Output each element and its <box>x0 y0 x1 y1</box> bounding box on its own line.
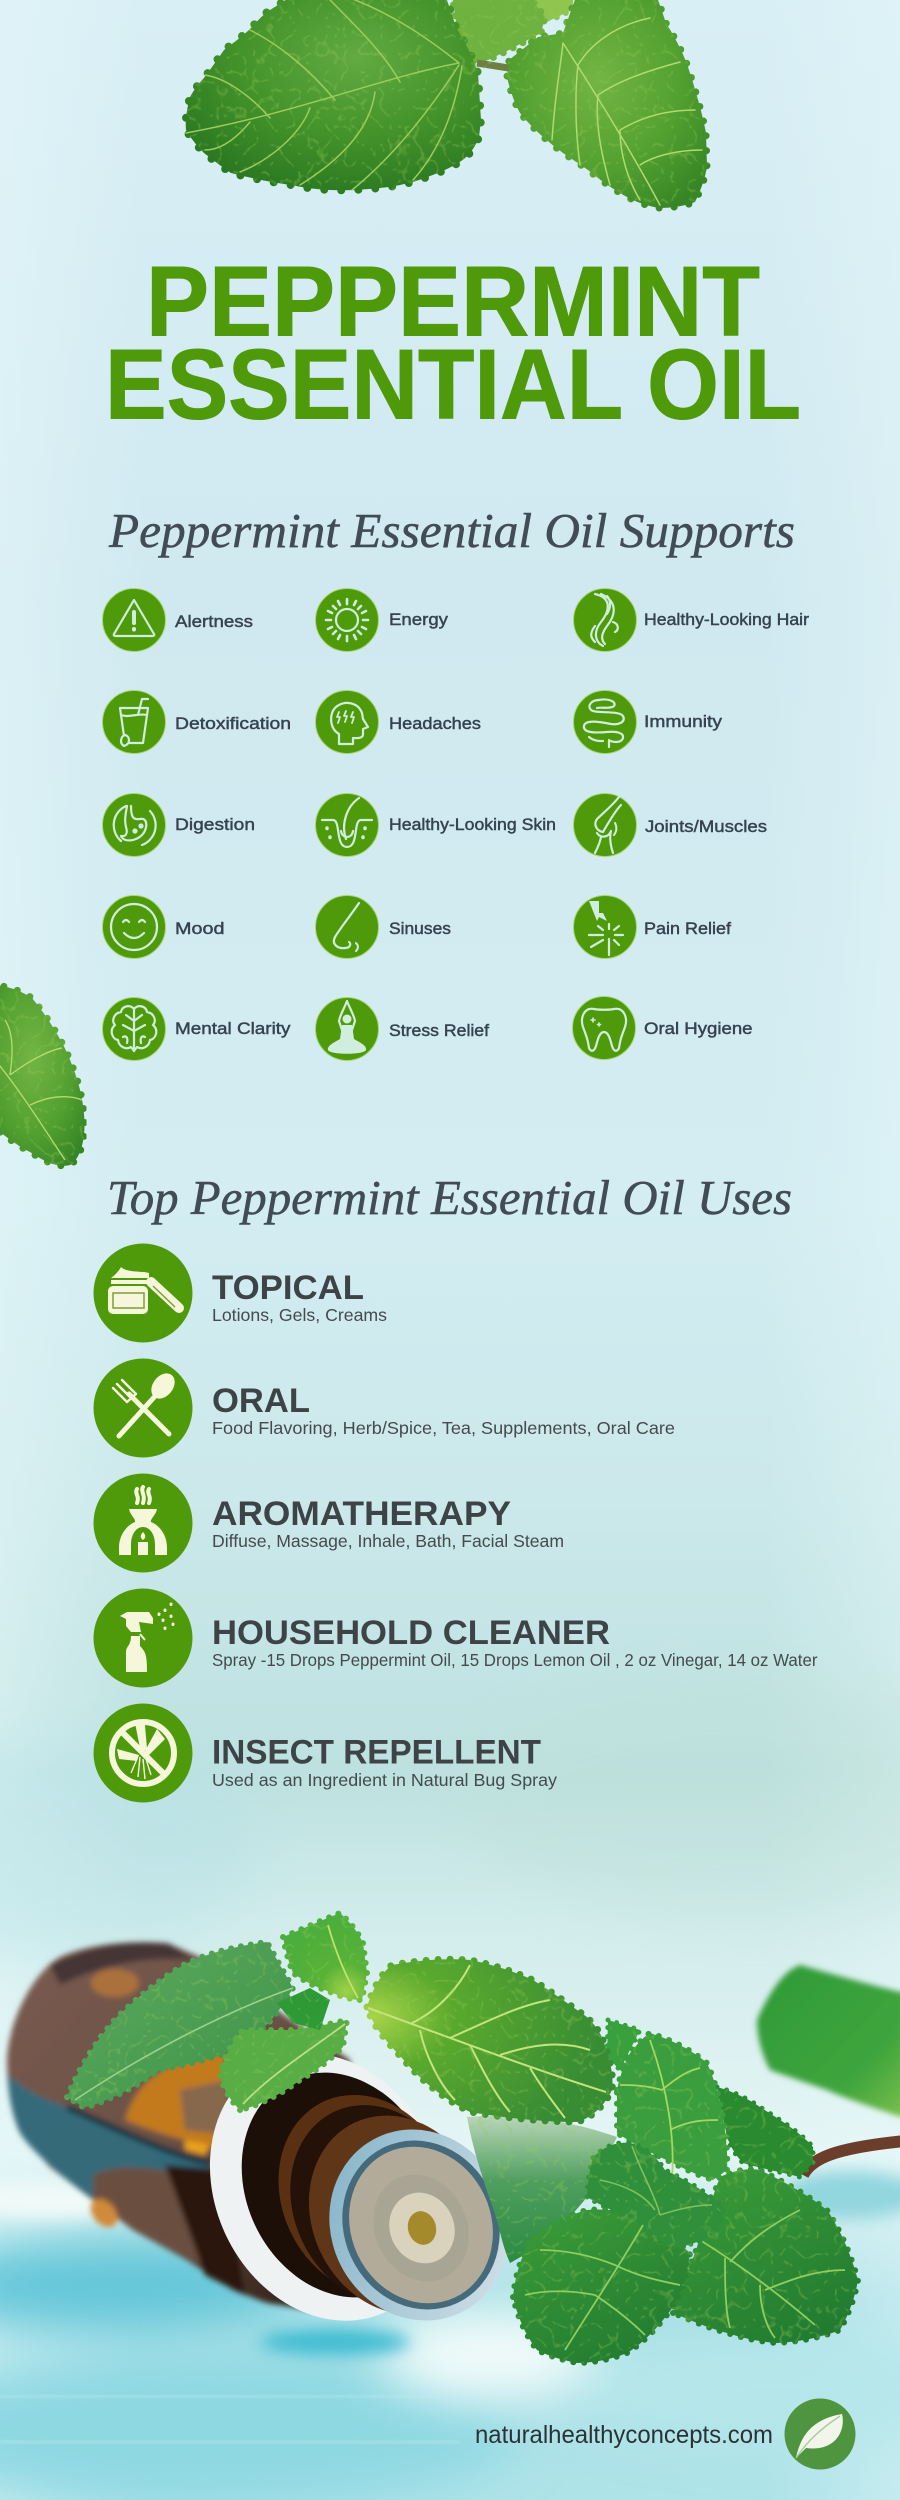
blurred right leaf <box>757 1965 900 2118</box>
use: Aromatherapy <box>94 1474 564 1572</box>
top mint leaves <box>186 0 707 208</box>
item: Mental Clarity <box>102 998 291 1060</box>
leaf: big center <box>367 1959 613 2122</box>
leaf: top middle <box>452 0 545 63</box>
fresh mint sprig <box>67 1913 858 2363</box>
stem <box>803 2141 900 2175</box>
leaf: middle cluster <box>587 2143 723 2248</box>
item: Immunity: Immunity <box>644 712 723 731</box>
item: Digestion: Digestion <box>175 815 255 834</box>
use: Topical: TOPICAL <box>212 1269 364 1307</box>
item: Energy: Energy <box>389 610 449 629</box>
leaf: top small <box>283 1913 367 2000</box>
item: Detoxification <box>102 690 291 754</box>
use: Insect Repellent: Used as an Ingredient in Natural Bug Spray <box>212 1770 557 1790</box>
item: Joints/Muscles <box>574 794 767 856</box>
side mint leaf <box>0 985 84 1166</box>
use: Household Cleaner: HOUSEHOLD CLEANER <box>212 1614 610 1652</box>
item: Mood <box>102 896 224 958</box>
leaf: small left front <box>220 2020 347 2110</box>
use: Household Cleaner: Spray -15 Drops Peppermint Oil, 15 Drops Lemon Oil , 2 oz Vinegar, 14 oz Water <box>212 1650 818 1670</box>
item: Pain Relief: Pain Relief <box>644 919 731 938</box>
use: Household Cleaner <box>94 1588 818 1688</box>
item: Healthy-Looking Hair <box>574 588 809 652</box>
use: Oral <box>94 1358 675 1458</box>
leaf: top bright sprig <box>527 0 574 20</box>
use: Insect Repellent <box>94 1704 557 1802</box>
item: Headaches: Headaches <box>389 714 481 733</box>
uses list <box>94 1244 818 1802</box>
use: Oral: ORAL <box>212 1382 310 1420</box>
item: Energy <box>316 588 449 652</box>
use: Oral: Food Flavoring, Herb/Spice, Tea, Supplements, Oral Care <box>212 1418 675 1438</box>
use: Aromatherapy: AROMATHERAPY <box>212 1495 511 1533</box>
leaf behind right <box>717 2087 813 2177</box>
heading: supports: Peppermint Essential Oil Supports <box>108 503 795 558</box>
use: Insect Repellent: INSECT REPELLENT <box>212 1734 541 1772</box>
item: Detoxification: Detoxification <box>175 714 291 733</box>
leaf small behind <box>607 2020 640 2070</box>
leaf: bottom right <box>673 2169 858 2343</box>
item: Joints/Muscles: Joints/Muscles <box>645 817 767 836</box>
item: Healthy-Looking Skin <box>316 794 556 856</box>
footer website: naturalhealthyconcepts.com <box>475 2421 773 2449</box>
use: Aromatherapy: Diffuse, Massage, Inhale, Bath, Facial Steam <box>212 1531 564 1551</box>
item: Mood: Mood <box>175 919 224 938</box>
item: Alertness <box>102 588 253 652</box>
footer logo <box>784 2398 856 2470</box>
item: Immunity <box>574 690 723 754</box>
dropper cap <box>298 2100 540 2350</box>
use: Topical <box>94 1244 387 1342</box>
title <box>105 246 801 440</box>
heading: uses: Top Peppermint Essential Oil Uses <box>107 1170 792 1225</box>
item: Alertness: Alertness <box>175 612 253 631</box>
title: PEPPERMINT <box>146 246 760 356</box>
blurred background leaf and stem <box>757 1965 900 2175</box>
leaf: top right large <box>507 0 707 208</box>
benefit grid <box>102 588 809 1060</box>
item: Oral Hygiene <box>572 996 752 1060</box>
item: Sinuses <box>316 896 451 958</box>
leaf: tall right <box>617 2033 727 2180</box>
item: Healthy-Looking Hair: Healthy-Looking Hair <box>644 610 809 629</box>
item: Oral Hygiene: Oral Hygiene <box>644 1019 752 1038</box>
use: Topical: Lotions, Gels, Creams <box>212 1305 387 1325</box>
leaf: top left large <box>186 0 481 190</box>
item: Digestion <box>102 794 255 856</box>
item: Headaches <box>316 690 481 754</box>
item: Healthy-Looking Skin: Healthy-Looking Skin <box>389 815 556 834</box>
item: Mental Clarity: Mental Clarity <box>175 1019 291 1038</box>
title: ESSENTIAL OIL <box>105 328 801 440</box>
leaf: bottom left <box>513 2209 690 2363</box>
item: Stress Relief: Stress Relief <box>389 1021 489 1040</box>
white collar <box>167 2015 487 2359</box>
item: Sinuses: Sinuses <box>389 919 451 938</box>
item: Stress Relief <box>316 998 489 1060</box>
dark neck <box>206 2040 474 2330</box>
photo scene: table surface <box>0 2171 900 2500</box>
leaf: long left <box>67 1942 293 2107</box>
leaf: curled small <box>277 1988 330 2030</box>
essential oil bottle <box>7 1942 540 2359</box>
leaf behind center <box>467 2116 617 2263</box>
bottle body <box>7 1942 350 2315</box>
leaf stem <box>477 63 509 68</box>
item: Pain Relief <box>574 896 731 958</box>
